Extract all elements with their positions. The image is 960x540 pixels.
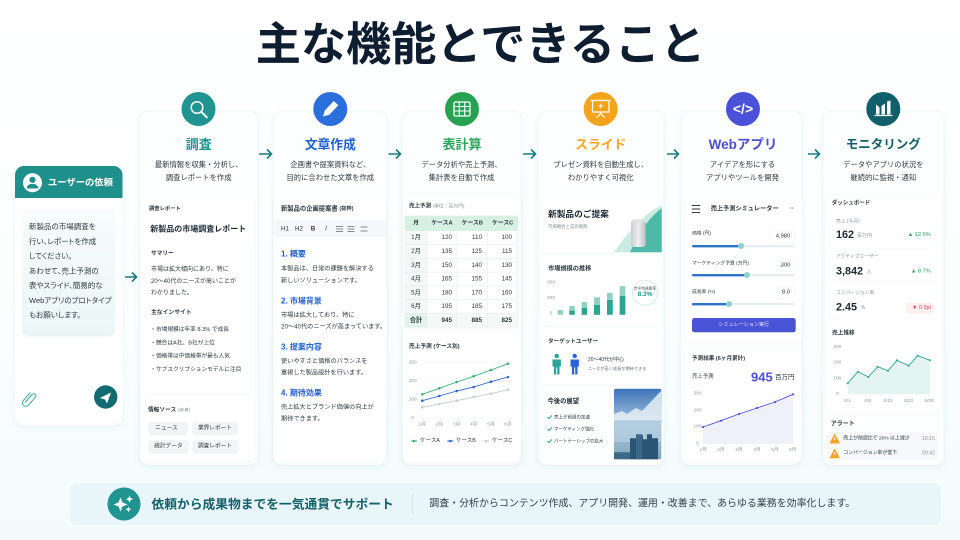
arrow: writing to spreadsheet <box>388 150 400 158</box>
report summary box <box>145 244 250 393</box>
request message bubble: 行い、レポートを作成 <box>29 236 97 246</box>
slide: market size chart: 200 <box>547 295 555 301</box>
sales table: 4月 <box>411 275 421 283</box>
growth rate slider: 8.0 <box>782 290 790 296</box>
document section 3: 使いやすさと価格のバランスを <box>281 357 368 365</box>
monitoring description: データやアプリの状況を <box>843 160 923 169</box>
panel: slides card <box>538 92 664 465</box>
sales table: 合計 <box>410 315 423 324</box>
monitoring description <box>843 160 923 182</box>
editor toolbar: I <box>325 226 327 232</box>
sales table: 170 <box>471 289 482 296</box>
KPI: conversion rate: 2.45 <box>836 301 857 313</box>
KPI: active users: ▲ 8.7% <box>911 269 931 275</box>
editor toolbar <box>274 220 386 237</box>
line chart: sales by case: 4月 <box>470 422 477 428</box>
sales table: 155 <box>471 276 482 283</box>
editor toolbar: H1 <box>281 226 290 232</box>
slide: future outlook <box>548 389 661 459</box>
slide: future outlook: 売上が前週の加速 <box>554 414 590 420</box>
document section 1: 新しいソリューションです。 <box>281 276 361 284</box>
line chart: sales by case: 2月 <box>436 422 443 428</box>
sales table: 195 <box>441 303 452 310</box>
KPI: monthly sales: 売上 (今月) <box>836 218 860 224</box>
slide: cover <box>541 198 662 252</box>
document section 4: 売上拡大とブランド価値の向上が <box>281 403 375 411</box>
document section 1: 本製品は、日常の課題を解決する <box>281 264 374 272</box>
KPI: conversion rate: % <box>861 305 866 311</box>
document section 3: 3. 提案内容 <box>281 342 322 352</box>
area chart: sales trend: 300 <box>833 344 842 350</box>
sales table: ケースB <box>462 218 483 226</box>
sales table: 150 <box>441 262 452 269</box>
growth rate slider: 成長率 (%) <box>692 288 716 295</box>
forecast results panel: 売上予測 <box>692 372 714 380</box>
report summary box: サマリー <box>151 250 174 257</box>
report summary box: ・サブスクリプションモデルに注目 <box>150 365 241 373</box>
slide: future outlook: マーケティング強化 <box>554 426 595 432</box>
information sources <box>148 406 239 454</box>
arrow: web app to monitoring <box>808 150 820 158</box>
heading: spreadsheet: 表計算 <box>442 137 482 152</box>
writing description: 企画書や提案資料など、 <box>290 160 370 169</box>
price slider <box>692 230 795 249</box>
sales table: 115 <box>502 248 512 255</box>
spreadsheet description <box>421 160 502 182</box>
dashboard panel <box>826 195 941 412</box>
forecast line chart: 1月 <box>700 447 707 453</box>
sales table: 2月 <box>411 247 421 255</box>
alerts section: アラート <box>831 420 855 427</box>
line chart: sales by case: 6月 <box>504 422 512 428</box>
icon: paperclip <box>22 393 36 406</box>
KPI: active users: アクティブユーザー <box>836 252 879 260</box>
sales table: 825 <box>501 317 512 324</box>
document preview <box>274 198 386 461</box>
writing description <box>287 160 374 182</box>
sales table: 135 <box>441 248 452 255</box>
KPI: monthly sales: 百万円 <box>857 233 872 239</box>
banner description: 調査・分析からコンテンツ作成、アプリ開発、運用・改善まで、あらゆる業務を効率化します。 <box>429 496 855 510</box>
slide: market size chart <box>541 257 662 325</box>
heading: web app: Webアプリ <box>709 137 777 152</box>
sales table: 945 <box>441 317 452 324</box>
icon: code <box>726 92 760 126</box>
icon: product speaker <box>631 219 646 247</box>
sales table: 5月 <box>411 288 421 296</box>
heading: research: 調査 <box>186 137 212 152</box>
forecast results panel: 945 <box>751 370 773 384</box>
information sources: ニュース <box>155 424 178 431</box>
request message bubble: あわせて、売上予測の <box>29 265 99 275</box>
request message bubble <box>22 209 115 336</box>
panel: writing card <box>273 92 387 465</box>
information sources: 業界レポート <box>198 423 232 431</box>
document section 2 <box>281 296 386 330</box>
report summary box: ・競合はA社、B社が上位 <box>150 338 215 346</box>
spreadsheet preview <box>403 196 520 462</box>
growth-rate badge: 8.3% <box>638 291 653 298</box>
slide: future outlook: パートナーシップの拡大 <box>554 438 604 444</box>
document section 2: 市場は拡大しており、特に <box>281 311 355 319</box>
document section 3 <box>281 342 368 376</box>
forecast line chart: 300 <box>693 390 702 396</box>
area chart: sales trend: 6/1 <box>844 398 851 404</box>
simulator controls panel: 売上予測シミュレーター <box>711 204 779 212</box>
report summary box: ・市場規模は年率 8.3% で成長 <box>150 325 229 333</box>
web app description: アイデアを形にする <box>710 160 775 169</box>
alerts section: 09:42 <box>922 451 935 457</box>
area chart: sales trend: 6/15 <box>883 398 893 404</box>
panel: research card <box>140 92 258 465</box>
document section 2: 2. 市場背景 <box>281 296 322 306</box>
forecast results panel: 百万円 <box>775 373 794 381</box>
spreadsheet preview: 売上予測 (単位：百万円) <box>409 202 465 210</box>
sales table: 110 <box>472 234 482 241</box>
banner headline: 依頼から成果物までを一気通貫でサポート <box>152 496 394 512</box>
document section 1: 1. 概要 <box>281 248 306 258</box>
forecast line chart: 5月 <box>771 447 779 453</box>
document section 4 <box>281 388 375 422</box>
slide: target users: 20〜40代が中心 <box>588 356 624 363</box>
marketing budget slider: マーケティング予算 (万円) <box>692 260 749 266</box>
request message bubble: 新製品の市場調査を <box>29 221 96 231</box>
line chart: sales by case: 200 <box>409 378 417 384</box>
price slider: 4,980 <box>776 234 790 240</box>
alerts section: 10:15 <box>922 436 935 442</box>
forecast results panel <box>686 350 802 461</box>
forecast line chart: 0 <box>696 440 699 446</box>
area chart: sales trend: 6/22 <box>904 398 914 404</box>
research description: 最新情報を収集・分析し、 <box>155 160 242 169</box>
sales table: 160 <box>501 289 512 296</box>
icon: code: </> <box>733 100 753 116</box>
bottom banner <box>70 483 941 525</box>
growth-rate badge: 年平均成長率 <box>634 286 656 290</box>
title: 主な機能とできること <box>256 19 705 70</box>
slide: target users: ニーズが高く成長が期待できる <box>588 365 646 372</box>
research report preview: 新製品の市場調査レポート <box>150 224 246 234</box>
heading: monitoring: モニタリング <box>846 136 921 152</box>
arrow: slides to web app <box>667 150 678 158</box>
growth-rate badge <box>632 280 658 305</box>
area chart: sales trend: 200 <box>833 360 842 366</box>
slide: cover: 新製品のご提案 <box>548 208 609 219</box>
icon: table <box>445 92 479 126</box>
sales table: 145 <box>501 276 512 283</box>
dashboard panel: ダッシュボード <box>832 198 870 206</box>
sales table: 180 <box>441 289 452 296</box>
simulator controls panel: ·· <box>790 206 794 212</box>
research report preview: 調査レポート <box>149 204 181 212</box>
icon: pencil <box>313 92 347 126</box>
sales table: 885 <box>471 317 482 324</box>
slides description: わかりやすく可視化 <box>568 173 634 182</box>
KPI: monthly sales: 162 <box>836 229 854 241</box>
research description: 調査レポートを作成 <box>166 173 232 182</box>
sales table: 165 <box>441 276 452 283</box>
arrow: spreadsheet to slides <box>523 150 536 158</box>
simulator controls panel <box>686 198 802 342</box>
monitoring description: 継続的に監視・通知 <box>850 173 916 182</box>
document section 1 <box>281 248 374 284</box>
report summary box: 主なインサイト <box>151 308 192 316</box>
request message bubble: してください。 <box>29 252 72 261</box>
web app description <box>706 160 780 182</box>
run simulation button: シミュレーション実行 <box>718 321 769 328</box>
area chart: sales trend <box>832 328 934 404</box>
forecast line chart: 3月 <box>735 447 743 453</box>
panel: user request <box>15 166 122 425</box>
sales table: 125 <box>471 248 482 255</box>
sales table: 120 <box>441 234 452 241</box>
icon: person blue <box>570 354 579 374</box>
line chart: sales by case: 1月 <box>419 422 426 428</box>
price slider: 価格 (円) <box>692 230 711 236</box>
document section 2: 20〜40代のニーズが高まっています。 <box>281 322 386 330</box>
KPI: conversion rate: コンバージョン率 <box>836 290 874 296</box>
writing description: 目的に合わせた文章を作成 <box>287 173 374 182</box>
icon: magnifier <box>182 92 216 126</box>
report summary box: 20〜40代のニーズが高いことが <box>151 277 236 285</box>
forecast line chart: 2月 <box>717 447 725 453</box>
sales table: 130 <box>501 262 512 269</box>
icon: presentation board <box>584 92 618 126</box>
sales table: ケースA <box>431 218 453 226</box>
panel: web app card <box>681 92 802 465</box>
line chart: sales by case: 300 <box>409 360 417 366</box>
slide: market size chart: 0 <box>550 310 553 316</box>
slide: target users: ターゲットユーザー <box>548 337 599 345</box>
slide: cover: 市場機会と成長戦略 <box>548 223 588 230</box>
sales table: 140 <box>471 262 482 269</box>
research description <box>155 160 242 182</box>
heading: slides: スライド <box>575 137 626 152</box>
spreadsheet description: 集計表を自動で作成 <box>429 173 494 182</box>
research report preview <box>140 198 254 461</box>
forecast line chart: 4月 <box>753 447 761 453</box>
slide: target users <box>541 330 662 384</box>
spreadsheet description: データ分析や売上予測、 <box>421 160 502 169</box>
area chart: sales trend: 6/8 <box>864 398 871 404</box>
KPI: conversion rate <box>831 285 937 318</box>
forecast line chart: 100 <box>693 424 702 430</box>
heading: writing: 文章作成 <box>305 137 356 152</box>
sales table: 月 <box>413 219 419 226</box>
KPI: monthly sales <box>831 216 937 247</box>
chart legend: ケースC <box>492 437 512 444</box>
area chart: sales trend: 100 <box>833 376 842 382</box>
document preview: 新製品の企画提案書 (抜粋) <box>281 204 354 212</box>
sales table: ケースC <box>492 218 514 226</box>
line chart: sales by case: 100 <box>409 396 417 402</box>
icon: warning <box>830 449 839 458</box>
KPI: active users: 3,842 <box>836 266 863 278</box>
KPI: monthly sales: ▲ 12.5% <box>908 232 931 238</box>
editor toolbar: B <box>311 226 316 232</box>
information sources: 統計データ <box>154 442 183 450</box>
slide: market size chart: 300 <box>547 280 555 286</box>
panel: monitoring card <box>823 92 944 465</box>
line chart: sales by case: 売上予測 (ケース別) <box>409 342 460 350</box>
marketing budget slider <box>692 260 795 278</box>
report summary box: 市場は拡大傾向にあり、特に <box>151 265 229 273</box>
sales table: 185 <box>471 303 482 310</box>
run simulation button <box>692 318 796 332</box>
document section 3: 重視した製品設計を行います。 <box>281 368 367 376</box>
chart legend <box>411 437 512 444</box>
line chart: sales by case <box>409 342 512 444</box>
sales table: 100 <box>501 234 512 241</box>
document section 4: 期待できます。 <box>281 414 324 422</box>
slides description <box>553 160 648 182</box>
chart legend: ケースA <box>420 437 440 444</box>
request message bubble: もお願いします。 <box>29 310 81 320</box>
chart legend: ケースB <box>456 437 476 444</box>
arrow: research to writing <box>259 150 272 158</box>
city skyline photo <box>614 389 661 459</box>
KPI: conversion rate: ▼ 0.3pt <box>912 305 931 311</box>
panel: spreadsheet card <box>402 92 522 465</box>
sales table: 175 <box>501 303 512 310</box>
forecast line chart: 6月 <box>789 447 796 453</box>
alerts section: コンバージョン率が低下 <box>843 449 897 456</box>
line chart: sales by case: 5月 <box>487 422 495 428</box>
slide: future outlook: 今後の展望 <box>548 396 579 405</box>
report summary box: わかりました。 <box>151 290 193 296</box>
icon: bar chart <box>866 92 900 126</box>
sales table: 6月 <box>411 302 421 310</box>
request message bubble: Webアプリのプロトタイプ <box>29 296 112 305</box>
line chart: sales by case: 3月 <box>453 422 460 428</box>
document section 4: 4. 期待効果 <box>281 388 322 398</box>
alerts section: 売上が前週比で 20% 以上減少 <box>843 434 910 442</box>
sales table: 1月 <box>411 233 421 241</box>
forecast line chart <box>693 390 796 453</box>
area chart: sales trend: 売上推移 <box>832 328 855 336</box>
sales table <box>405 216 518 327</box>
icon: sparkle <box>108 488 140 520</box>
area chart: sales trend: 6/29 <box>925 398 934 404</box>
user request header <box>15 166 122 198</box>
area chart: sales trend: 0 <box>836 391 839 397</box>
forecast line chart: 200 <box>693 408 702 414</box>
information sources: 調査レポート <box>198 442 232 450</box>
KPI: active users: 人 <box>867 270 872 276</box>
icon: send button <box>94 385 117 409</box>
sales table: 3月 <box>411 261 421 269</box>
slide: market size chart: 市場規模の推移 <box>548 264 591 272</box>
editor toolbar: H2 <box>295 226 304 232</box>
slides description: プレゼン資料を自動生成し、 <box>553 160 648 169</box>
forecast results panel: 予測結果 (6ヶ月累計) <box>692 354 745 362</box>
user request header: ユーザーの依頼 <box>48 176 114 188</box>
icon: warning <box>830 434 839 443</box>
marketing budget slider: 300 <box>781 262 790 268</box>
line chart: sales by case: 0 <box>411 415 414 421</box>
growth rate slider <box>692 287 795 307</box>
arrow: request to research <box>125 272 136 282</box>
alerts section <box>827 420 938 460</box>
report summary box: ・価格帯は中価格帯が最も人気 <box>150 352 230 360</box>
web app description: アプリやツールを開発 <box>706 173 780 182</box>
KPI: active users <box>831 250 937 280</box>
request message bubble: 表やスライド、簡易的な <box>29 280 103 290</box>
icon: menu <box>692 206 700 212</box>
icon: person teal <box>552 354 561 374</box>
information sources: 情報ソース (参考) <box>148 406 191 414</box>
